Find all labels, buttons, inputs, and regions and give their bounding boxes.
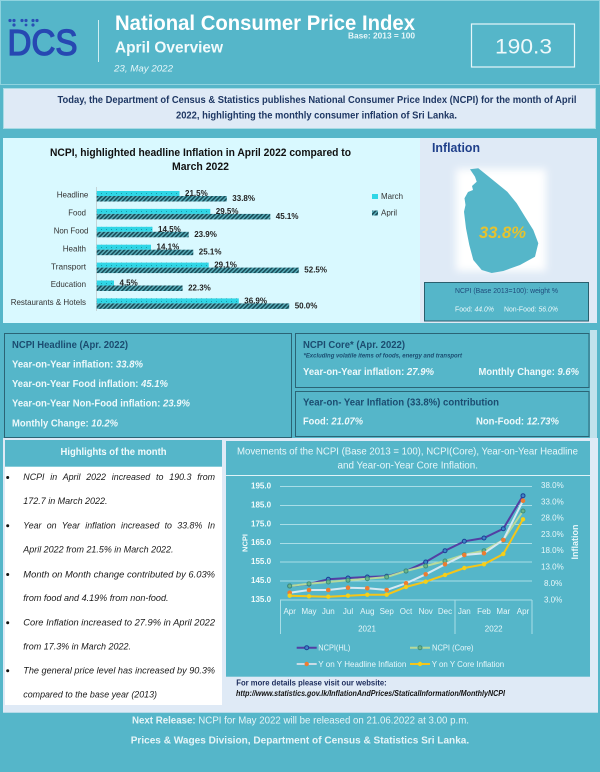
left axis title: NCPI [240,534,250,552]
bar value labels: 52.5% [304,266,327,275]
chart legend: Y on Y Core Inflation [432,659,504,669]
month labels: Mar [496,607,511,616]
category labels: Health [63,243,86,253]
highlights heading: Highlights of the month [60,447,166,458]
right axis title: Inflation [570,524,580,560]
bar value labels [120,189,327,310]
bar value labels: 4.5% [120,278,138,288]
category labels: Food [68,208,86,218]
month labels: Aug [360,607,374,616]
bar value labels: 21.5% [185,189,208,198]
card: NCPI headline: Monthly Change: 10.2% [12,418,119,430]
index value box: 190.3 [495,36,552,58]
month labels: Jun [322,607,335,616]
legend: April [381,208,397,218]
division credit: Prices & Wages Division, Department of Census & Statistics Sri Lanka. [131,734,469,746]
panel: highlights [5,440,222,705]
left axis labels [251,482,272,604]
chart legend [297,642,504,669]
weights box [424,282,588,321]
highlights text: The general price level has increased by 90.3% [23,665,215,675]
category labels: Restaurants & Hotels [11,297,86,307]
March bars [97,191,239,303]
chart heading [237,446,578,472]
bar value labels: 22.3% [188,284,211,292]
month labels: Jan [458,607,471,616]
bar value labels: 23.9% [194,230,217,239]
highlights text: from 17.3% in March 2022. [23,641,131,651]
subtitle: April Overview [115,40,224,56]
line: year on year core inflation [288,517,525,599]
right axis labels: 8.0% [544,579,562,588]
logo: DCS: DCS [8,22,78,63]
footer [131,714,469,746]
highlights text: NCPI in April 2022 increased to 190.3 from [23,472,215,482]
next release note: Next Release: NCPI for May 2022 will be released on 21.06.2022 at 3.00 p.m. [132,714,469,726]
card: inflation contribution: Year-on- Year Inflation (33.8%) contribution [303,397,499,409]
month labels: Feb [477,607,491,616]
highlights text: from food and 4.19% from non-food. [23,593,168,603]
month labels: Sep [380,607,394,616]
month labels: Nov [419,607,433,616]
header [8,12,574,74]
category labels [11,190,89,307]
website note [236,678,506,698]
bar value labels: 50.0% [295,301,317,310]
chart heading: Movements of the NCPI (Base 2013 = 100), NCPI(Core), Year-on-Year Headline [237,446,578,458]
left axis labels: 145.0 [251,576,272,585]
right axis labels: 33.0% [541,497,564,506]
card: inflation contribution: Food: 21.07% [303,415,364,427]
card: NCPI core [296,334,589,388]
highlights text: 172.7 in March 2022. [23,496,107,506]
month labels: 2022 [485,625,503,634]
right axis labels: 28.0% [541,514,564,523]
card: NCPI headline: Year-on-Year Food inflation: 45.1% [12,378,169,390]
left axis labels: 165.0 [251,538,272,547]
website note: http://www.statistics.gov.lk/InflationAndPrices/StaticalInformation/MonthlyNCPI [236,689,506,698]
card: NCPI core: Year-on-Year inflation: 27.9% [303,366,435,378]
card: NCPI core: *Excluding volatile items of foods, energy and transport [304,354,463,360]
chart legend: Y on Y Headline Inflation [318,659,407,669]
month labels: Dec [438,607,452,616]
index value box [472,24,574,67]
month labels: 2021 [358,625,376,634]
category labels: Headline [57,190,89,200]
heading: Inflation [432,140,480,155]
card: NCPI headline: Year-on-Year inflation: 33.8% [12,358,144,370]
bar value labels: 29.5% [216,207,238,216]
card: inflation contribution: Non-Food: 12.73% [476,415,560,427]
map: Sri Lanka [464,168,538,273]
line: NCPI headline [288,494,525,588]
right axis labels: 3.0% [544,595,562,604]
website note: For more details please visit our website: [236,678,387,688]
weights box: Food: 44.0% [455,304,494,314]
category labels: Education [51,279,86,289]
card: NCPI headline: Year-on-Year Non-Food inflation: 23.9% [12,398,191,410]
card: NCPI headline: NCPI Headline (Apr. 2022) [12,339,128,351]
right axis labels [541,481,564,604]
legend: March [381,191,403,201]
April bars [97,196,299,309]
panel: inflation map [420,138,597,323]
left axis labels: 185.0 [251,500,272,509]
month labels: Jul [343,607,353,616]
weights box: NCPI (Base 2013=100): weight % [455,286,558,295]
highlights text [22,472,215,699]
date: 23, May 2022 [113,64,174,74]
right axis labels: 38.0% [541,481,564,490]
inflation value: 33.8% [479,223,526,242]
card: inflation contribution [296,392,589,436]
month labels [283,607,530,634]
month labels: Apr [517,607,530,616]
bullets [6,476,9,672]
panel: line chart [226,441,590,677]
right axis labels: 23.0% [541,530,564,539]
chart title: NCPI, highlighted headline Inflation in April 2022 compared to [50,147,351,159]
chart title: March 2022 [172,161,229,173]
highlights text: Year on Year inflation increased to 33.8% In [23,520,215,530]
category labels: Transport [51,261,87,271]
right axis labels: 18.0% [541,546,564,555]
bar value labels: 36.9% [244,296,267,305]
month labels: Apr [283,607,296,616]
card: NCPI core: Monthly Change: 9.6% [478,366,580,378]
left axis labels: 155.0 [251,557,272,566]
bar value labels: 14.5% [158,225,181,234]
highlights text: April 2022 from 21.5% in March 2022. [22,544,174,554]
month labels: May [301,607,317,616]
title: National Consumer Price Index [115,12,415,35]
base note: Base: 2013 = 100 [348,32,416,40]
bar value labels: 45.1% [276,212,298,221]
panel: bar chart [3,138,420,323]
chart heading: and Year-on-Year Core Inflation. [338,460,478,472]
card: NCPI core: NCPI Core* (Apr. 2022) [303,339,405,351]
highlights text: Month on Month change contributed by 6.03% [23,569,215,579]
left axis labels: 195.0 [251,482,272,490]
intro text panel [4,88,596,128]
bar value labels: 25.1% [199,248,221,257]
weights box: Non-Food: 56.0% [504,304,558,314]
month labels: Oct [400,607,413,616]
line: year on year headline inflation [287,498,525,595]
bar value labels: 14.1% [156,243,179,252]
chart title [50,147,351,173]
left axis labels: 135.0 [251,595,272,604]
highlights text: Core Inflation increased to 27.9% in April 2022 [23,617,215,627]
bar value labels: 29.1% [214,261,237,270]
card: NCPI headline [4,334,292,438]
intro text panel: 2022, highlighting the monthly consumer inflation of Sri Lanka. [176,110,457,122]
category labels: Non Food [54,226,89,236]
left axis labels: 175.0 [251,519,272,528]
bar value labels: 33.8% [232,194,255,203]
legend [372,191,403,218]
chart legend: NCPI(HL) [318,642,350,652]
chart legend: NCPI (Core) [432,642,474,652]
right axis labels: 13.0% [541,562,564,572]
line: NCPI core [288,509,525,588]
highlights text: compared to the base year (2013) [23,689,157,699]
